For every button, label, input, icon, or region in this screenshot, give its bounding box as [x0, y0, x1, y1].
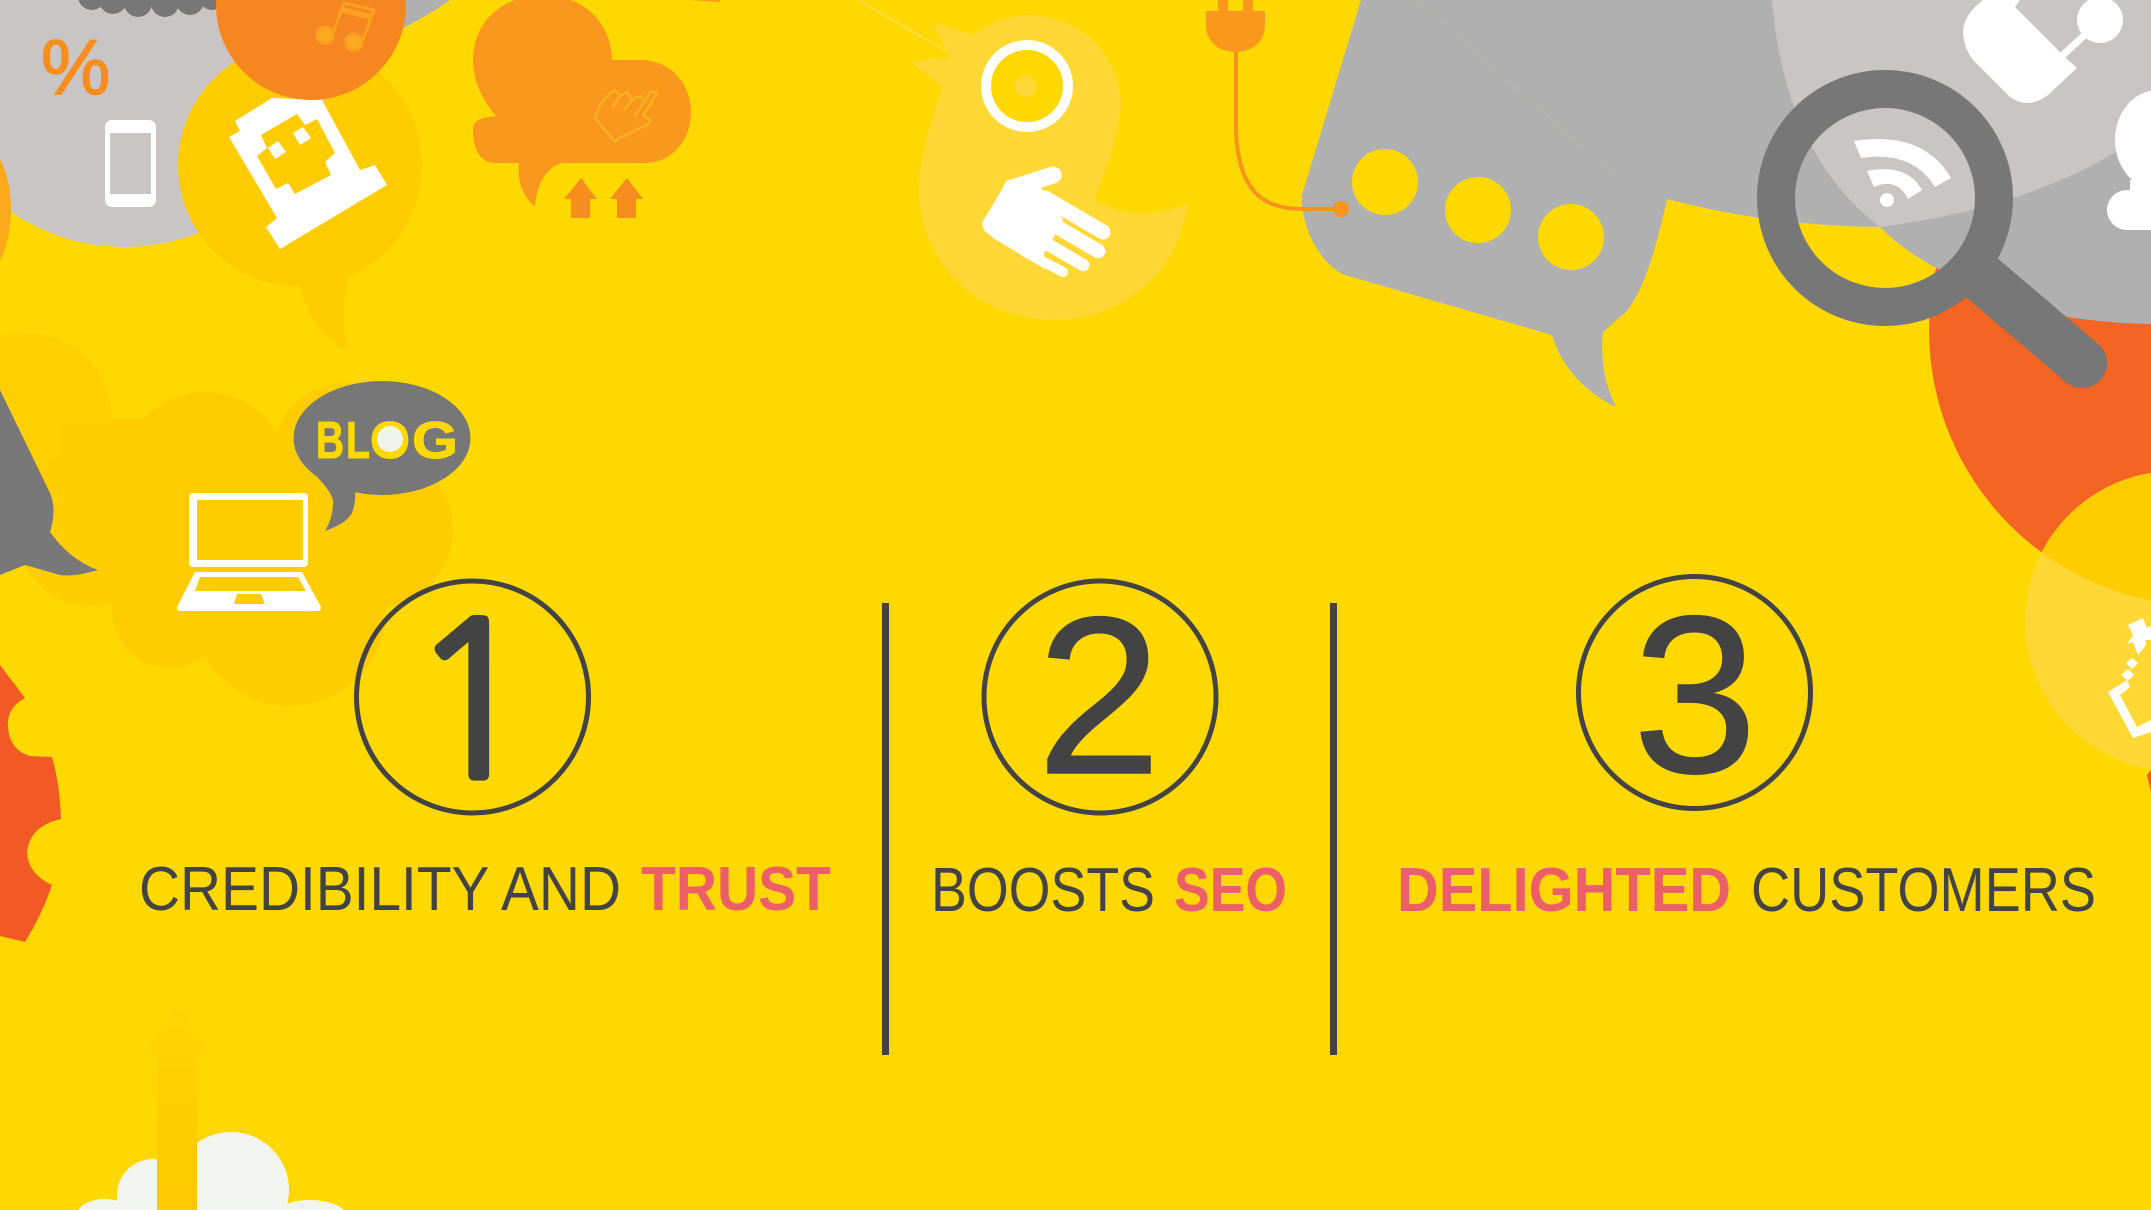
- left edge orange sliver: [0, 142, 11, 278]
- line from bird beak: [858, 0, 948, 52]
- up arrows: [564, 178, 643, 218]
- big gray speech bubble: [1302, 0, 2151, 407]
- divider two: [1330, 603, 1337, 1055]
- blog wordmark: [316, 412, 458, 470]
- music note icon: [317, 3, 374, 50]
- bird with hand: [911, 15, 1188, 320]
- caption: credibility and trust: TRUST: [641, 855, 831, 924]
- blog wordmark: G: [412, 412, 458, 470]
- step 1 number badge: 1: [407, 594, 537, 808]
- yellow speech bubble with pixel ghost: [178, 43, 422, 350]
- up arrow bottom-left: [143, 1005, 210, 1210]
- top-left gray bubble group: [0, 0, 450, 247]
- laptop icon: [177, 493, 321, 611]
- phone icon: [105, 120, 156, 207]
- blog wordmark: B: [316, 412, 344, 470]
- step 1 number badge: [356, 581, 588, 813]
- plug cord: [1236, 52, 1347, 215]
- blog wordmark: O: [370, 412, 410, 470]
- lock icon: [1963, 0, 2123, 103]
- hand icon: [983, 175, 1103, 272]
- caption: delighted customers: DELIGHTED: [1397, 856, 1731, 925]
- small top-edge accents: [690, 0, 720, 2]
- caption: delighted customers: [1397, 856, 2096, 925]
- step 2 number badge: 2: [1037, 571, 1161, 821]
- gray speech tail left: [0, 390, 98, 575]
- caption: credibility and trust: CREDIBILITY AND: [139, 855, 621, 924]
- orange cloud with cursor and arrows: [473, 0, 691, 218]
- caption: boosts seo: BOOSTS: [931, 856, 1155, 925]
- step 3 number badge: [1578, 570, 1810, 820]
- orange circle right: [1929, 54, 2151, 606]
- pixel ghost icon: [229, 98, 387, 249]
- step 3 number badge: 3: [1633, 570, 1757, 820]
- orange gear fragment: [0, 665, 61, 942]
- scalloped gray cloud: [78, 0, 225, 17]
- light gray circle top right: [1772, 0, 2151, 227]
- plug head: [1206, 0, 1265, 52]
- caption: delighted customers: CUSTOMERS: [1751, 856, 2096, 925]
- hand cursor icon: [595, 90, 657, 142]
- blog speech bubble: [294, 381, 470, 531]
- person icon: [2107, 90, 2151, 230]
- eye: [986, 45, 1068, 127]
- lower-left yellow cloud: [0, 333, 453, 706]
- percent icon: %: [41, 23, 110, 111]
- pixel hand icon: [2108, 618, 2151, 738]
- divider one: [882, 603, 889, 1055]
- magnifying glass: [1776, 89, 2082, 363]
- blog wordmark: L: [346, 412, 370, 470]
- light yellow circle right with pixel hand: [2025, 471, 2151, 792]
- wifi icon: [1854, 139, 1951, 207]
- white cloud bottom-left: [77, 1132, 346, 1210]
- caption: boosts seo: SEO: [1174, 856, 1287, 925]
- step 2 number badge: [984, 571, 1216, 821]
- orange music circle: [216, 0, 406, 100]
